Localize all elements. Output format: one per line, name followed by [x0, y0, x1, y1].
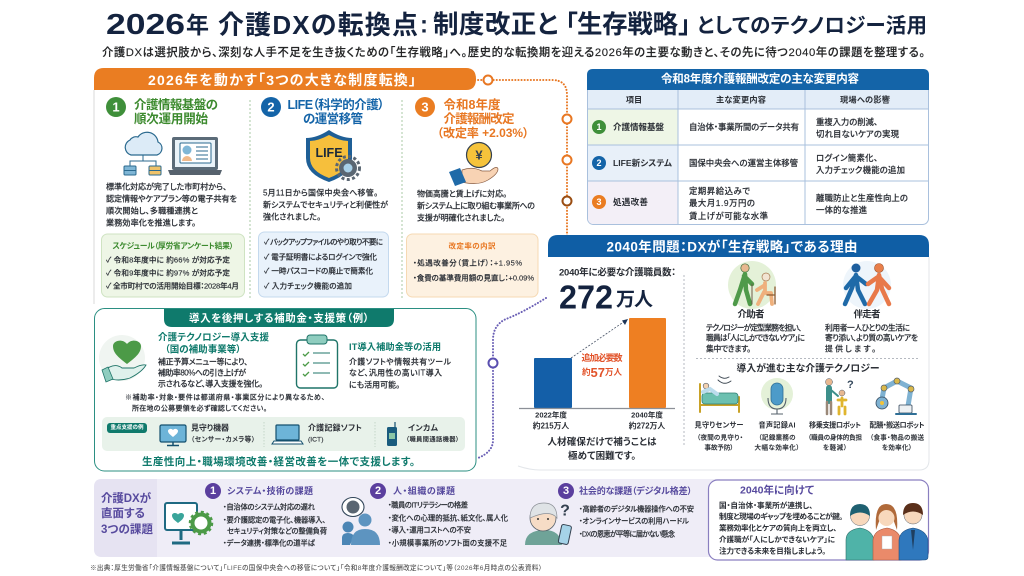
- subsidy: IT: IT導入補助金等の活用: [349, 341, 441, 352]
- row 1: 自治体・事業所間のデータ共有: [689, 122, 799, 132]
- priority support strip: [102, 417, 465, 451]
- icon: robot arm: [876, 378, 916, 414]
- challenge 1: システム・技術の課題: [227, 485, 313, 496]
- icon: LIFE shield and gear: LIFE: [315, 146, 343, 160]
- icon: laptop: [272, 425, 303, 444]
- column 3: 令和8年度改定: 新システム上に取り組む事業所への: [417, 200, 535, 210]
- row 1: [592, 117, 900, 139]
- checklist box: ✓ 一時パスコードの廃止で簡素化: [264, 266, 373, 276]
- icon: elderly person with phone: ?: [560, 502, 570, 520]
- column 3: 令和8年度改定: 令和8年度: [444, 97, 501, 112]
- column 3: 令和8年度改定: （改定率 +2.03%）: [437, 125, 529, 140]
- role: 伴走者: 寄り添い、より質の高いケアを: [825, 332, 918, 342]
- icon: three staff members: [846, 503, 928, 560]
- icon: bed with sensor waves: [700, 376, 739, 412]
- challenges label: [101, 491, 154, 536]
- row 3: 定期昇給込みで: [689, 186, 750, 196]
- role: 伴走者: [825, 261, 918, 354]
- icon: monitor: [160, 425, 186, 446]
- title: 年: [186, 12, 209, 38]
- challenge 3: ・オンラインサービスの利用ハードル: [579, 516, 689, 526]
- row 2: 国保中央会への運営主体移管: [689, 158, 799, 168]
- row 3: [592, 186, 908, 221]
- schedule box: ✓ 令和9年度中に 約97% が対応予定: [106, 268, 230, 278]
- row 3: 最大月1.9万円の: [689, 198, 755, 208]
- subsidy summary: 生産性向上・職場環境改善・経営改善を一体で支援します。: [142, 455, 415, 468]
- title: 2026: [106, 9, 185, 41]
- dotted connector: orange: [475, 80, 567, 236]
- tech: delivery robot: [870, 378, 925, 452]
- column 1: 介護情報基盤: 介護情報基盤の: [134, 97, 218, 112]
- panel: toward 2040: 介護職が「人にしかできないケア」に: [719, 534, 835, 544]
- column 1: 介護情報基盤: 業務効率化を推進します。: [106, 218, 196, 228]
- title: 制度改正と: [433, 11, 558, 39]
- column 1: 介護情報基盤: 順次運用開始: [134, 111, 208, 126]
- chart conclusion: 人材確保だけで補うことは: [548, 436, 657, 448]
- subsidy: IT: [349, 341, 451, 390]
- title: としてのテクノロジー活用: [697, 14, 927, 38]
- column 2: LIFE: 新システムでセキュリティと利便性が: [263, 200, 388, 210]
- challenge 1: [205, 483, 327, 548]
- panel: toward 2040: 2040年に向けて: [740, 484, 814, 496]
- challenge 2: 人・組織の課題: [393, 485, 455, 496]
- chart conclusion: [548, 436, 657, 462]
- column 2: LIFE: LIFE（科学的介護）: [288, 97, 384, 112]
- icon: LIFE shield and gear: [306, 130, 360, 182]
- tech: transfer robot: ?: [847, 379, 854, 391]
- row 3: 3: [596, 197, 602, 207]
- panel: three challenges: [94, 479, 720, 557]
- challenge 2: ・職員のITリテラシーの格差: [388, 500, 468, 510]
- column 3: 令和8年度改定: 物価高騰と賃上げに対応。: [417, 188, 507, 198]
- row 3: 処遇改善: [613, 196, 648, 207]
- column 3: 令和8年度改定: [406, 97, 538, 297]
- checklist box: ✓ 入力チェック機能の追加: [264, 280, 352, 290]
- panel: toward 2040: 国・自治体・事業所が連携し、: [719, 500, 813, 510]
- staffing headline: 272: [559, 278, 613, 316]
- subsidy: care technology: 補正予算メニュー等により、: [158, 356, 248, 366]
- role: 介助者: テクノロジーが定型業務を担い、: [706, 322, 802, 332]
- panel: 2040 problem: 2040年問題：DXが「生存戦略」である理由: [606, 238, 858, 254]
- bar chart: 2022年度: [535, 410, 567, 420]
- column 2: LIFE: の運営移管: [303, 111, 363, 126]
- tech: monitoring sensor: 事故予防）: [704, 442, 734, 452]
- source note: ※出典：厚生労働省「介護情報基盤について」「LIFEの国保中央会への移管について」「令和8年度介護報酬改定について」等（2026年6月時点の公表資料）: [90, 563, 542, 572]
- column 1: 介護情報基盤: 1: [112, 100, 120, 114]
- subsidies heading: 導入を後押しする補助金・支援策（例）: [189, 312, 369, 324]
- role: 伴走者: 提供します。: [825, 344, 876, 354]
- role: 介助者: 職員は「人にしかできないケア」に: [706, 332, 805, 342]
- icon: coin and hand: ¥: [475, 148, 483, 162]
- tech: monitoring sensor: [694, 376, 744, 452]
- breakdown box: ・食費の基準費用額の見直し：+0.09%: [413, 272, 534, 282]
- challenge 2: ・変化への心理的抵抗、紙文化、属人化: [388, 514, 509, 522]
- icon: caregiver and elder: [728, 261, 776, 309]
- row 1: 介護情報基盤: [613, 121, 664, 132]
- column 1: 介護情報基盤: [102, 97, 244, 297]
- challenges label: 3つの課題: [101, 523, 154, 536]
- panel side line: [93, 90, 95, 304]
- challenge 3: 3: [563, 485, 569, 497]
- bar chart: 2040年度: [631, 410, 663, 420]
- priority support strip: （センサー・カメラ等）: [191, 434, 255, 444]
- icon: two people with thought bubble: [342, 498, 380, 545]
- title: 「: [553, 11, 578, 39]
- checklist box: ✓ 電子証明書によるログインで強化: [264, 252, 377, 262]
- orange heading bar: 2026年を動かす「3つの大きな制度転換」: [148, 72, 416, 88]
- dotted connector: purple: [478, 298, 546, 458]
- panel: toward 2040: 制度と現場のギャップを埋めることが鍵。: [719, 511, 843, 521]
- column 3: 令和8年度改定: 介護報酬改定: [444, 111, 515, 126]
- role: 介助者: 介助者: [738, 308, 765, 320]
- panel: 3 institutional shifts: [94, 68, 538, 304]
- subsidy: IT: 介護ソフトや情報共有ツール: [349, 356, 451, 366]
- subtitle: 介護DXは選択肢から、深刻な人手不足を生き抜くための「生存戦略」へ。歴史的な転換期を迎える2026年の主要な動きと、その先に待つ2040年の課題を整理する。: [102, 45, 925, 59]
- challenge 3: ・DXの恩恵が平等に届かない懸念: [579, 530, 676, 538]
- schedule box: ✓ 全市町村での活用開始目標：2028年4月: [106, 280, 239, 290]
- icon: monitor and gear: [165, 503, 212, 543]
- subsidies heading: [164, 309, 394, 327]
- tech: voice AI: （記録業務の: [758, 432, 796, 442]
- icon: heart in hand: [99, 335, 146, 382]
- row 1: 重複入力の削減、: [816, 117, 878, 127]
- panel: toward 2040: 注力できる未来を目指しましょう。: [719, 546, 826, 556]
- schedule box: ✓ 令和8年度中に 約66% が対応予定: [106, 254, 230, 264]
- table header row: 項目: [626, 96, 642, 104]
- title: 生存戦略: [577, 11, 678, 39]
- subsidy: care technology: （国の補助事業等）: [165, 344, 241, 356]
- panel: toward 2040: [708, 480, 928, 560]
- icon: two walking figures: [843, 261, 891, 309]
- priority support strip: （職員間通話機器）: [406, 436, 459, 444]
- title: [106, 9, 927, 41]
- staffing headline: [559, 266, 676, 316]
- tech: delivery robot: （食事・物品の搬送: [870, 432, 924, 442]
- connector nodes: [484, 76, 572, 368]
- challenge 3: ・高齢者のデジタル機器操作への不安: [579, 504, 694, 514]
- bar chart: 約57万人: [582, 364, 622, 380]
- challenge 1: 1: [210, 485, 216, 497]
- role: 介助者: 集中できます。: [706, 344, 751, 354]
- challenge 2: [370, 483, 509, 548]
- tech: transfer robot: （職員の身体的負担: [808, 432, 862, 442]
- role: 伴走者: 利用者一人ひとりの生活に: [825, 322, 910, 332]
- tech: voice AI: 大幅な効率化）: [754, 442, 800, 452]
- challenge 1: ・データ連携・標準化の道半ば: [223, 538, 316, 548]
- challenge 2: ・小規模事業所のソフト面の支援不足: [388, 538, 508, 548]
- challenge 3: 社会的な課題（デジタル格差）: [579, 485, 692, 496]
- bar chart: 約272万人: [629, 420, 665, 430]
- subsidy: IT: にも活用可能。: [349, 380, 400, 390]
- icon: elderly person with phone: [525, 502, 572, 545]
- panel: toward 2040: 業務効率化とケアの質向上を両立し、: [719, 522, 837, 532]
- icon: carer and robot: [826, 378, 846, 414]
- icon: clipboard: [296, 335, 338, 388]
- tech: transfer robot: [808, 378, 862, 452]
- subsidy: care technology: 示されるなど、導入支援を強化。: [158, 378, 263, 388]
- challenges label: 介護DXが: [101, 491, 152, 505]
- title: 介護DXの転換点: [218, 10, 418, 40]
- challenge 1: ・要介護認定の電子化、機器導入、: [223, 516, 326, 524]
- priority support strip: (ICT): [308, 436, 323, 444]
- title: :: [420, 12, 428, 38]
- tech: voice AI: [754, 378, 800, 452]
- bar chart: 追加必要数: [582, 352, 622, 363]
- breakdown box: 改定率の内訳: [448, 240, 496, 250]
- column 3: 令和8年度改定: 支援が明確化されました。: [417, 212, 505, 222]
- challenges label: 直面する: [101, 506, 145, 520]
- subsidy: care technology: [158, 332, 269, 388]
- icon: microphone: [761, 378, 793, 414]
- row 2: LIFE新システム: [613, 157, 673, 168]
- challenge 1: ・自治体のシステム対応の遅れ: [223, 502, 316, 512]
- row 2: ログイン簡素化、: [816, 153, 878, 163]
- icon: coin and hand: [449, 142, 498, 186]
- orange heading bar: [94, 68, 476, 90]
- column 2: LIFE: 2: [267, 100, 275, 114]
- technology section heading: 導入が進む主な介護テクノロジー: [736, 362, 880, 374]
- bar chart: [519, 318, 675, 430]
- subsidy: care technology: 介護テクノロジー導入支援: [158, 332, 269, 344]
- tech: monitoring sensor: 見守りセンサー: [694, 420, 744, 430]
- breakdown box: [406, 234, 538, 297]
- row 1: 切れ目ないケアの実現: [816, 129, 900, 139]
- tech: voice AI: 音声記録AI: [758, 420, 796, 430]
- row 3: 離職防止と生産性向上の: [816, 193, 908, 203]
- schedule box: [102, 234, 244, 297]
- panel: subsidies: [94, 308, 476, 471]
- subsidy: care technology: 補助率80%への引き上げが: [158, 368, 246, 378]
- column 1: 介護情報基盤: 標準化対応が完了した市町村から、: [106, 182, 227, 192]
- row 1: 1: [596, 122, 602, 132]
- staffing headline: 2040年に必要な介護職員数：: [559, 266, 676, 278]
- checklist box: ✓ バックアップファイルのやり取り不要に: [264, 238, 383, 246]
- subsidy note: 所在地の公募要領を必ず確認してください。: [132, 404, 267, 412]
- panel: reimbursement revision table: 令和8年度介護報酬改定の主な変更内容: [661, 72, 860, 86]
- title: 」: [678, 11, 703, 39]
- priority support strip: 見守り機器: [191, 422, 229, 432]
- column 2: LIFE: [258, 97, 388, 297]
- tech: transfer robot: 移乗支援ロボット: [809, 420, 861, 430]
- priority support strip: インカム: [408, 424, 438, 432]
- chart conclusion: 極めて困難です。: [568, 450, 636, 462]
- tech: delivery robot: を効率化）: [882, 442, 912, 452]
- challenge 2: 2: [375, 485, 381, 497]
- row 3: 一体的な推進: [816, 205, 868, 215]
- icon: intercom radio: [387, 422, 397, 446]
- priority support strip: 重点支援の例: [110, 423, 144, 431]
- icon: cloud and laptop: [124, 132, 222, 175]
- challenge 2: ・導入・運用コストへの不安: [388, 526, 471, 534]
- subsidy note: ※補助率・対象・要件は都道府県・事業区分により異なるため、: [125, 392, 325, 402]
- table header row: [626, 94, 890, 104]
- subsidy note: [125, 392, 325, 412]
- column 1: 介護情報基盤: 認定情報やケアプラン等の電子共有を: [106, 194, 237, 204]
- tech: transfer robot: を軽減）: [823, 442, 847, 452]
- column 3: 令和8年度改定: 3: [421, 100, 429, 114]
- column 2: LIFE: 5月11日から国保中央会へ移管。: [263, 188, 378, 198]
- tech: delivery robot: 配膳・搬送ロボット: [870, 420, 925, 430]
- role: 介助者: [706, 261, 805, 354]
- subsidy: IT: など、汎用性の高いIT導入: [349, 368, 442, 378]
- row 2: 入力チェック機能の追加: [816, 165, 905, 175]
- bar chart: 約215万人: [533, 420, 569, 430]
- breakdown box: ・処遇改善分（賃上げ）：+1.95%: [413, 258, 522, 268]
- table header row: 現場への影響: [840, 94, 890, 104]
- panel: 2040 problem: [518, 235, 929, 470]
- priority support strip: 介護記録ソフト: [308, 422, 362, 432]
- staffing headline: 万人: [616, 290, 653, 310]
- table header row: 主な変更内容: [716, 94, 766, 104]
- tech: monitoring sensor: （夜間の見守り・: [697, 434, 743, 442]
- schedule box: スケジュール（厚労省アンケート結果）: [112, 240, 234, 250]
- column 2: LIFE: 強化されました。: [263, 212, 321, 222]
- row 3: 賃上げが可能な水準: [689, 211, 768, 221]
- checklist box: [258, 232, 388, 297]
- challenge 3: [558, 483, 694, 538]
- role: 伴走者: 伴走者: [854, 308, 881, 320]
- column 1: 介護情報基盤: 順次開始し、多職種連携と: [106, 206, 198, 216]
- row 2: [592, 153, 905, 175]
- panel: reimbursement revision table: [587, 69, 929, 224]
- challenge 1: セキュリティ対策などの整備負荷: [227, 526, 327, 536]
- row 2: 2: [596, 158, 602, 168]
